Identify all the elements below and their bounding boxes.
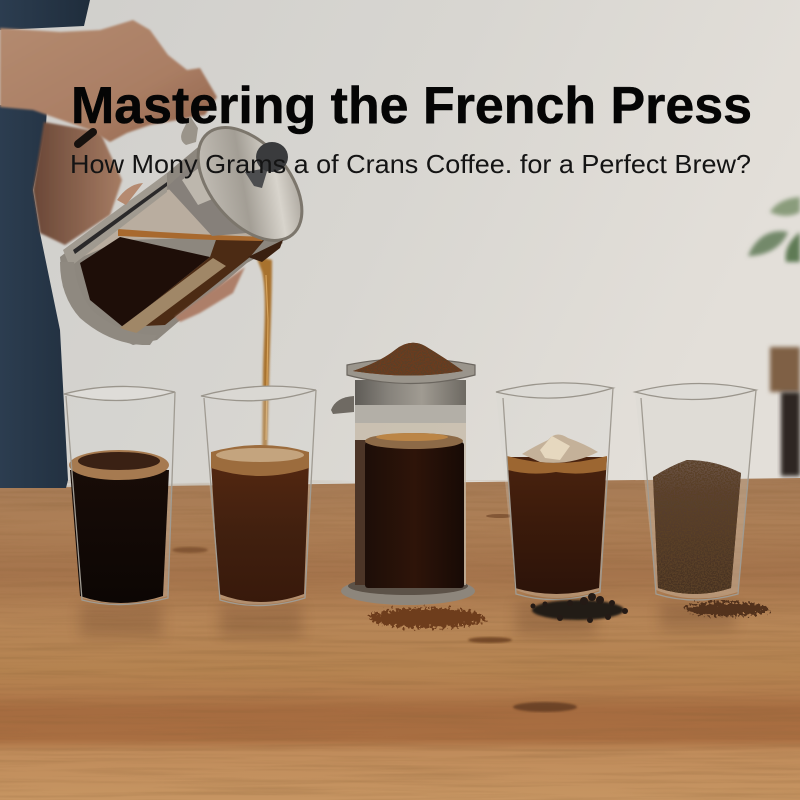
side table and plant: [748, 197, 800, 476]
lid knob: [245, 168, 268, 188]
subtitle: How Mony Grams a of Crans Coffee. for a Perfect Brew?: [70, 149, 751, 179]
steel frame strips: [63, 173, 167, 267]
upright french press: [331, 343, 475, 605]
press handle end: [78, 132, 93, 144]
press body: [60, 143, 283, 345]
steel band: [167, 157, 247, 236]
glass four: coffee with foam: [496, 383, 613, 600]
coffee beans pile: [530, 593, 628, 623]
upper hand and arm: [0, 20, 217, 142]
glass upper: [70, 180, 262, 262]
scattered grounds: [685, 602, 769, 616]
lower fingers: [175, 267, 245, 322]
spilled ground coffee: [369, 608, 485, 628]
lid: [178, 108, 322, 260]
title: Mastering the French Press: [71, 77, 752, 135]
glass two: coffee being poured: [201, 386, 316, 606]
spout: [248, 240, 283, 262]
coffee in press: [80, 237, 210, 327]
pouring stream: [256, 256, 272, 462]
table top: [0, 478, 800, 800]
coffee grounds mound: [353, 343, 463, 376]
hinge: [181, 116, 198, 145]
table reflections of glasses: [80, 602, 735, 638]
tilted french press: [60, 108, 322, 345]
forearm behind press: [33, 122, 122, 245]
person torso: [0, 0, 90, 488]
glass five: ground coffee: [635, 383, 756, 600]
glass one: dark coffee: [64, 386, 175, 605]
wall background: [0, 0, 800, 500]
